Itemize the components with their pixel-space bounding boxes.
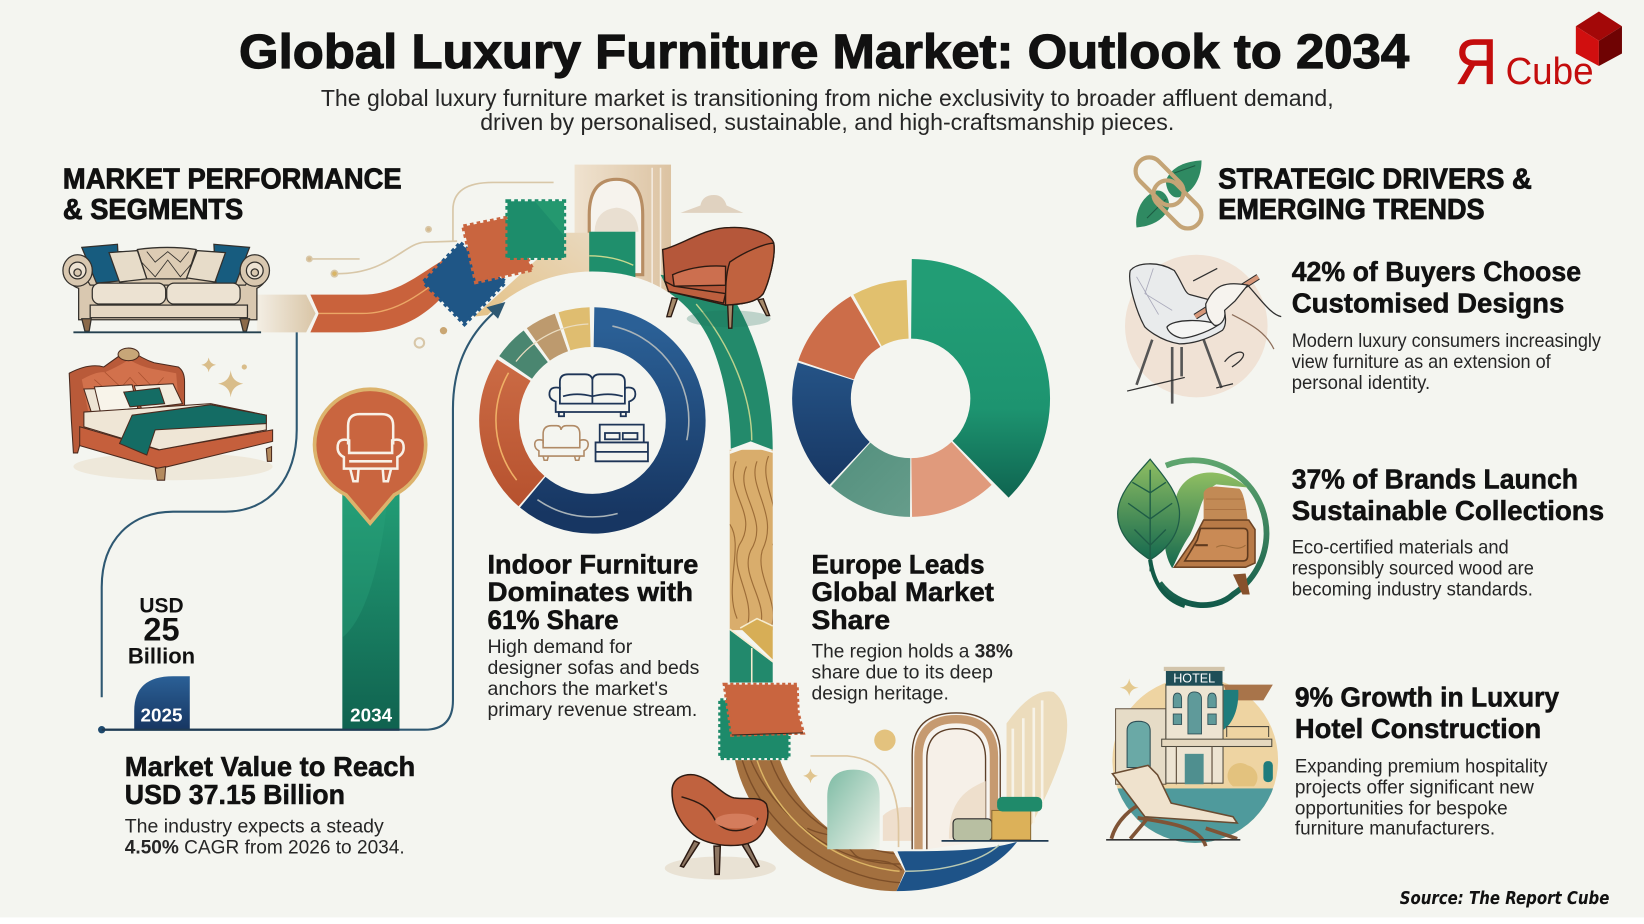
bar: 2025 xyxy=(134,676,190,730)
bar: 2034: 2034 xyxy=(350,704,393,725)
text: customised designs xyxy=(1292,256,1601,394)
bar: 2025: 2025 xyxy=(140,704,182,725)
chart: regional donut xyxy=(811,299,1010,498)
connector line from sofa to left bar xyxy=(102,332,297,697)
bar: 2034 xyxy=(342,493,399,730)
logo: RCube xyxy=(1455,12,1622,98)
text: europe: Share xyxy=(812,605,890,635)
text: market value: Market Value to Reach xyxy=(125,751,415,782)
text: indoor furniture: High demand for xyxy=(488,636,633,658)
text: sustainable collections: responsibly sourced wood are xyxy=(1292,558,1534,580)
icon: hotel with lounge chair xyxy=(1106,667,1278,846)
bar axis xyxy=(102,729,399,731)
icon: chain and leaves xyxy=(1130,152,1207,234)
text: sustainable collections xyxy=(1292,464,1604,601)
ribbon: green curved band xyxy=(661,275,773,450)
text: europe: design heritage. xyxy=(812,682,949,704)
text: customised designs: 42% of Buyers Choose xyxy=(1292,256,1581,287)
text: indoor furniture xyxy=(488,550,699,721)
text: customised designs: Customised Designs xyxy=(1292,287,1564,318)
text: hotel construction: furniture manufacturers. xyxy=(1295,818,1495,840)
scene: arch interior xyxy=(803,691,1067,849)
bar value: usd 25 billion: Billion xyxy=(128,644,195,669)
logo: RCube: Cube xyxy=(1506,50,1594,92)
arrow: left axis to donut xyxy=(98,302,505,733)
icon: armchair top xyxy=(663,227,774,328)
text: europe: share due to its deep xyxy=(812,661,993,683)
text: customised designs: view furniture as an extension of xyxy=(1292,351,1551,373)
icon: leaf and wooden cabinet xyxy=(1118,459,1267,606)
pin with armchair icon xyxy=(315,389,426,523)
text: indoor furniture: anchors the market's xyxy=(488,678,668,700)
icon: bed xyxy=(69,348,273,480)
text: hotel construction: Expanding premium hospitality xyxy=(1295,756,1548,778)
text: europe: Global Market xyxy=(812,577,994,607)
text: hotel construction: opportunities for bespoke xyxy=(1295,798,1508,820)
text: hotel construction: projects offer significant new xyxy=(1295,777,1535,799)
heading: market performance and segments: & SEGMENTS xyxy=(63,193,243,225)
heading: strategic drivers: STRATEGIC DRIVERS & xyxy=(1218,163,1532,195)
text: market value: 4.50% CAGR from 2026 to 2034. xyxy=(125,836,405,858)
chart: indoor furniture donut xyxy=(496,324,689,517)
text: europe: Europe Leads xyxy=(812,550,985,580)
text: indoor furniture: Indoor Furniture xyxy=(488,550,698,580)
icon: armchair bottom xyxy=(665,775,776,880)
text: indoor furniture: Dominates with xyxy=(488,577,693,607)
subtitle: driven by personalised, sustainable, and high-craftsmanship pieces. xyxy=(480,109,1174,135)
white arc behind indoor donut xyxy=(445,272,731,524)
ribbon: green lower section xyxy=(730,619,773,683)
cloud xyxy=(680,195,743,213)
ribbon: tan arc band xyxy=(474,233,589,317)
ribbon: tan arrow band xyxy=(257,295,316,332)
icon: bed outline xyxy=(596,425,648,461)
ribbon: wood section xyxy=(730,450,773,630)
fabric swatches lower xyxy=(720,685,803,758)
bar value: usd 25 billion: 25 xyxy=(143,612,180,648)
bar value: usd 25 billion xyxy=(128,594,195,669)
text: customised designs: Modern luxury consumers increasingly xyxy=(1292,330,1601,352)
text: indoor furniture: primary revenue stream. xyxy=(488,699,697,721)
text: sustainable collections: Eco-certified materials and xyxy=(1292,537,1509,559)
text: sustainable collections: Sustainable Collections xyxy=(1292,495,1604,526)
text: europe xyxy=(812,550,1013,704)
icon: sofa xyxy=(63,244,269,332)
text: indoor furniture: 61% Share xyxy=(488,605,619,635)
icon: big sofa xyxy=(549,374,635,416)
icon: chair sketch with hand xyxy=(1125,255,1281,404)
subtitle xyxy=(321,85,1334,135)
ribbon: orange curved band xyxy=(310,253,461,332)
text: hotel construction xyxy=(1295,682,1560,840)
heading: market performance and segments xyxy=(63,163,402,225)
heading: strategic drivers: EMERGING TRENDS xyxy=(1218,193,1485,225)
text: market value: The industry expects a steady xyxy=(125,815,384,837)
text: sustainable collections: becoming industry standards. xyxy=(1292,579,1533,601)
icon: hotel with lounge chair: HOTEL xyxy=(1173,672,1215,686)
heading: market performance and segments: MARKET PERFORMANCE xyxy=(63,163,402,195)
text: indoor furniture: designer sofas and beds xyxy=(488,657,699,679)
bar value: usd 25 billion: USD xyxy=(139,594,184,617)
text: europe: The region holds a 38% xyxy=(812,640,1013,662)
text: customised designs: personal identity. xyxy=(1292,372,1430,394)
fabric swatches top xyxy=(424,201,564,324)
icon: small sofa xyxy=(535,426,588,460)
source note: Source: The Report Cube xyxy=(1400,888,1609,909)
text: hotel construction: 9% Growth in Luxury xyxy=(1295,682,1560,713)
decorative flow lines and dots xyxy=(307,182,554,348)
text: sustainable collections: 37% of Brands Launch xyxy=(1292,464,1578,495)
subtitle: The global luxury furniture market is transitioning from niche exclusivity to broader affluent demand, xyxy=(321,85,1334,111)
text: market value xyxy=(125,751,415,858)
ribbon: blue arc xyxy=(896,842,1017,891)
logo: RCube: Я xyxy=(1455,26,1497,98)
ribbon: green band through arch xyxy=(589,232,635,284)
text: market value: USD 37.15 Billion xyxy=(125,779,345,810)
ribbon: wood arc xyxy=(735,760,905,891)
text: hotel construction: Hotel Construction xyxy=(1295,713,1541,744)
heading: strategic drivers xyxy=(1218,163,1532,225)
arch background top xyxy=(575,165,671,306)
title: Global Luxury Furniture Market: Outlook to 2034 xyxy=(239,25,1409,79)
